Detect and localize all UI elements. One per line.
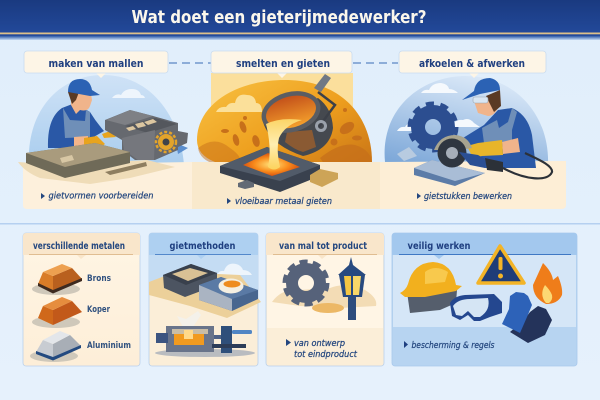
icon: gloves <box>502 292 552 343</box>
icon: goggles <box>450 294 502 321</box>
icon: pour stream <box>266 119 302 170</box>
backing <box>211 73 353 133</box>
heading label: maken van mallen <box>48 57 144 70</box>
cream ground <box>23 162 192 209</box>
sand spot <box>312 303 344 313</box>
caption: tot eindproduct <box>294 350 357 360</box>
caption: gietstukken bewerken <box>424 192 512 202</box>
panel: smelten en gieten <box>192 51 380 209</box>
heading label <box>211 51 352 78</box>
icon: warning triangle <box>478 246 524 283</box>
connector: smelten to afkoelen <box>353 62 398 64</box>
divider <box>0 223 600 224</box>
metal: aluminium: Aluminium <box>87 341 131 351</box>
icon: casting mold <box>105 110 188 160</box>
caption: vloeibaar metaal gieten <box>235 197 332 207</box>
panel: afkoelen en afwerken <box>380 51 566 209</box>
icon: casting machine <box>155 326 255 357</box>
steam <box>177 311 201 327</box>
sand mold <box>163 264 217 297</box>
sand <box>149 272 261 318</box>
stone slab <box>26 143 147 178</box>
icon: mold with molten metal <box>220 147 338 192</box>
cloud <box>217 264 252 275</box>
blue dome <box>29 75 184 165</box>
mold with metal <box>199 277 258 311</box>
card: gietmethoden <box>149 233 261 366</box>
metal: koper: Koper <box>87 305 110 315</box>
stone slab <box>414 160 485 186</box>
texture blobs <box>198 108 372 172</box>
cream ground <box>380 161 566 209</box>
heading label <box>399 51 546 78</box>
card: van mal tot product <box>266 233 384 366</box>
title banner <box>0 0 600 40</box>
clouds <box>397 83 480 131</box>
heading: van mal tot product <box>279 241 367 252</box>
caption: gietvormen voorbereiden <box>48 192 154 202</box>
cream ground <box>192 162 380 209</box>
heading label: smelten en gieten <box>236 57 330 70</box>
icon: grinder <box>434 135 552 178</box>
icon: flame <box>533 263 562 304</box>
orange dome <box>197 80 372 185</box>
metal: brons: Brons <box>87 274 111 284</box>
icon: gear <box>285 262 327 304</box>
card: veilig werken <box>392 233 577 366</box>
panel: maken van mallen <box>18 51 192 209</box>
icon: gear <box>410 104 456 150</box>
heading: verschillende metalen <box>33 241 125 252</box>
caption: bescherming & regels <box>412 341 495 351</box>
heading: veilig werken <box>408 241 470 252</box>
connector: mallen to smelten <box>169 62 211 64</box>
title: Wat doet een gieterijmedewerker? <box>132 7 426 28</box>
sand <box>18 160 175 184</box>
icon: worker <box>462 78 536 168</box>
icon: worker <box>48 79 116 149</box>
small block <box>397 147 417 161</box>
heading label: afkoelen & afwerken <box>419 57 525 70</box>
caption: van ontwerp <box>294 339 345 349</box>
heading label <box>24 51 168 78</box>
card: verschillende metalen <box>23 233 140 366</box>
cloud <box>112 89 145 98</box>
sand pile <box>272 285 376 308</box>
heading: gietmethoden <box>170 241 236 252</box>
icon: hard hat <box>400 262 462 313</box>
blue dome <box>385 76 548 165</box>
caption <box>286 339 357 360</box>
cloud <box>216 95 262 112</box>
icon: lantern <box>338 257 366 320</box>
icon: ladle <box>257 74 335 156</box>
